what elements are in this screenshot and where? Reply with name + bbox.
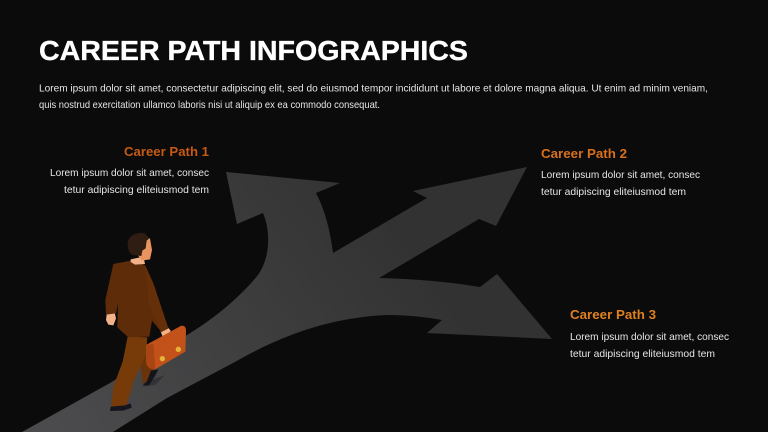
jacket	[105, 261, 168, 337]
briefcase	[146, 326, 186, 369]
intro text	[39, 82, 708, 111]
text: career path 2 description: tetur adipiscing eliteiusmod tem	[541, 186, 686, 198]
title: CAREER PATH INFOGRAPHICS	[39, 35, 468, 66]
heading: career path 2: Career Path 2	[541, 146, 627, 161]
panel: career path 3	[570, 307, 729, 360]
text: career path 3 description	[570, 331, 729, 360]
briefcase clasps	[160, 356, 165, 361]
panel: career path 1	[50, 144, 209, 196]
icon: walking businessman with briefcase	[105, 233, 186, 411]
panel: career path 2	[541, 146, 700, 198]
three-way forked road arrow	[22, 167, 552, 432]
text: career path 1 description	[50, 167, 209, 196]
shadow	[143, 375, 165, 387]
hand left	[106, 313, 116, 325]
hand right	[161, 327, 171, 337]
text: career path 1 description: Lorem ipsum dolor sit amet, consec	[50, 167, 209, 179]
text: career path 3 description: Lorem ipsum dolor sit amet, consec	[570, 331, 729, 343]
intro text: Lorem ipsum dolor sit amet, consectetur adipiscing elit, sed do eiusmod tempor incididunt ut labore et dolore magna aliqua. Ut enim ad minim veniam,	[39, 82, 708, 94]
head and face	[137, 238, 152, 261]
text: career path 2 description: Lorem ipsum dolor sit amet, consec	[541, 169, 700, 181]
heading: career path 3: Career Path 3	[570, 307, 656, 322]
front shoe	[110, 403, 132, 411]
text: career path 2 description	[541, 169, 700, 198]
hair	[128, 233, 149, 256]
heading: career path 1: Career Path 1	[124, 144, 209, 159]
collar and neck	[131, 257, 145, 265]
text: career path 3 description: tetur adipiscing eliteiusmod tem	[570, 348, 715, 360]
text: career path 1 description: tetur adipiscing eliteiusmod tem	[64, 184, 209, 196]
back leg and shoe	[137, 337, 154, 383]
front leg	[111, 337, 147, 409]
intro text: quis nostrud exercitation ullamco laboris nisi ut aliquip ex ea commodo consequat.	[39, 99, 380, 111]
